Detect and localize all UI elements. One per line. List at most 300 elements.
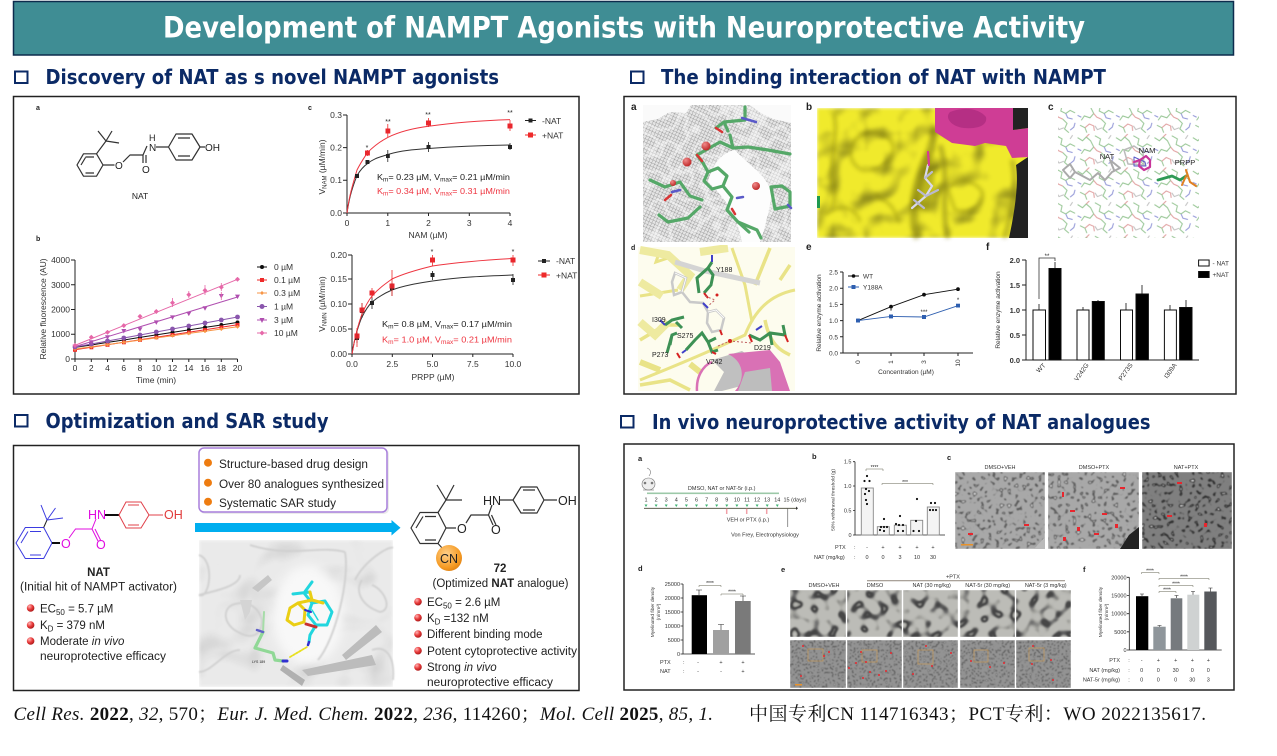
panel b: withdrawal threshold chart: 0 <box>865 555 869 561</box>
panel: optimization and SAR <box>14 446 579 690</box>
panel a: NAT structure: O <box>115 161 123 172</box>
panel f: fiber density chart: 0 <box>1157 678 1160 684</box>
panel a: dosing timeline: VEH or PTX (i.p.) <box>727 518 769 524</box>
panel c: PRPP kinetics: 10.0 <box>505 359 522 369</box>
panel c: nerve micrographs: DMSO+VEH <box>984 465 1016 471</box>
NAT bullet list <box>27 604 166 663</box>
panel b: fluorescence time course: Relative fluorescence (AU) <box>38 258 48 360</box>
panel d: fiber density chart: 0 <box>677 652 680 658</box>
panel d: ribbon interaction view: S275 <box>677 333 693 340</box>
panel a: dosing timeline: 2 <box>655 498 658 504</box>
panel a: dosing timeline: 7 <box>705 498 708 504</box>
panel d: fiber density chart: (n/mm²) <box>656 603 662 620</box>
panel f: mutant activation bar chart: 0.5 <box>1010 331 1020 340</box>
panel d: fiber density chart: - <box>697 669 699 675</box>
panel c: NAM kinetics: 1 <box>385 218 390 228</box>
panel f: fiber density chart: 10000 <box>1111 612 1126 618</box>
NAT caption: NAT <box>87 567 110 579</box>
NAT bullet list: EC <box>40 604 56 616</box>
panel a: dosing timeline: DMSO, NAT or NAT-5r (i.p.) <box>688 486 756 492</box>
panel d: fiber density chart <box>638 564 755 675</box>
compound 72 bullet list: =132 nM <box>440 613 489 625</box>
panel f: fiber density chart: NAT-5r (mg/kg) <box>1083 678 1120 684</box>
panel f: fiber density chart: Myelinated fiber density <box>1098 586 1104 637</box>
panel e: enzyme activation line chart: 1.0 <box>829 318 838 325</box>
panel c: nerve micrographs: c <box>947 453 951 462</box>
panel c: PRPP kinetics: K <box>382 334 388 344</box>
panel e: enzyme activation line chart: 0.5 <box>829 334 838 341</box>
panel d: ribbon interaction view: D219 <box>754 345 771 352</box>
panel f: mutant activation bar chart: 0.0 <box>1010 356 1020 365</box>
panel e: enzyme activation line chart: 0 <box>855 360 862 364</box>
panel e: enzyme activation line chart <box>806 242 973 376</box>
panel a: electron density map: a <box>631 102 637 113</box>
panel c: NAM kinetics: ** <box>425 112 431 119</box>
panel: in vivo activity <box>624 444 1234 690</box>
panel d: fiber density chart: PTX <box>660 660 671 666</box>
compound 72 structure: HN <box>483 494 501 508</box>
panel b: fluorescence time course: 2 <box>89 363 94 373</box>
NAT bullet list: Moderate in vivo <box>40 636 125 648</box>
compound 72 bullet list: D <box>435 618 441 626</box>
panel c: NAM kinetics: * <box>366 145 369 152</box>
panel f: mutant activation bar chart: I309A <box>1163 362 1179 380</box>
panel c: NAM kinetics: 4 <box>508 218 513 228</box>
panel d: fiber density chart: **** <box>706 581 714 587</box>
panel a: dosing timeline: 10 <box>734 498 740 504</box>
heading: binding interaction: The binding interaction of NAT with NAMPT <box>661 65 1106 89</box>
panel c: PRPP kinetics: = 0.17 µM/min <box>453 319 512 329</box>
panel b: fluorescence time course: 10 µM <box>274 328 298 338</box>
panel b: fluorescence time course: 0 µM <box>274 262 293 272</box>
panel f: fiber density chart: 0 <box>1140 678 1143 684</box>
NAT structure colored: O <box>61 537 71 551</box>
panel c: PRPP kinetics: V <box>317 326 327 332</box>
panel b: fluorescence time course: 6 <box>121 363 126 373</box>
compound 72 caption: 72 <box>494 563 506 575</box>
panel a: dosing timeline: Von Frey, Electrophysiology <box>731 532 799 538</box>
panel b: withdrawal threshold chart: 0 <box>848 533 852 539</box>
panel d: fiber density chart: : <box>683 669 685 675</box>
panel c: NAM kinetics: = 0.31 µM/min <box>452 186 510 196</box>
panel d: fiber density chart: - <box>720 669 722 675</box>
panel e: enzyme activation line chart: 2.5 <box>829 270 838 276</box>
panel c: NAM kinetics: c <box>308 105 312 112</box>
panel c: NAM kinetics: 0.3 <box>330 110 342 120</box>
panel a: dosing timeline: 12 <box>754 498 760 504</box>
panel b: fluorescence time course: 8 <box>138 363 143 373</box>
panel e: enzyme activation line chart: Relative enzyme activation <box>816 274 823 352</box>
compound 72 caption: (Optimized NAT analogue) <box>433 578 569 590</box>
panel b: withdrawal threshold chart: 30 <box>930 555 936 561</box>
panel c: PRPP kinetics: m <box>388 324 394 330</box>
panel c: PRPP kinetics: * <box>431 249 434 256</box>
panel c: wireframe with ligands: c <box>1048 102 1054 113</box>
panel b: withdrawal threshold chart: + <box>898 545 902 551</box>
panel b: fluorescence time course: 20 <box>233 363 242 373</box>
panel b: protein surface <box>806 102 1028 238</box>
panel a: dosing timeline: 5 <box>685 498 688 504</box>
panel a: NAT structure <box>36 105 220 201</box>
panel e: enzyme activation line chart: Concentration (µM) <box>878 369 934 376</box>
panel c: NAM kinetics: 0 <box>345 218 350 228</box>
compound 72 bullet list: Different binding mode <box>427 629 542 641</box>
panel d: ribbon interaction view: d <box>631 245 635 252</box>
panel f: fiber density chart: + <box>1191 658 1194 664</box>
panel b: withdrawal threshold chart <box>812 452 945 561</box>
panel b: withdrawal threshold chart: **** <box>871 465 878 471</box>
panel b: withdrawal threshold chart: : <box>854 545 856 551</box>
panel a: dosing timeline: 13 <box>764 498 770 504</box>
panel b: fluorescence time course: 0.1 µM <box>274 275 300 285</box>
panel d: fiber density chart: + <box>741 669 745 675</box>
panel c: PRPP kinetics: 0.10 <box>330 299 347 309</box>
panel a: dosing timeline: 3 <box>665 498 668 504</box>
panel a: NAT structure: H <box>149 133 156 143</box>
panel d: fiber density chart: + <box>719 660 723 666</box>
NAT caption <box>20 567 177 594</box>
panel: discovery of NAT <box>14 96 579 394</box>
panel c: PRPP kinetics: max <box>441 324 453 330</box>
NAT structure colored <box>16 502 183 558</box>
panel c: NAM kinetics: (µM/min) <box>317 139 327 176</box>
panel e: myelin micrographs: NAT-5r (3 mg/kg) <box>1025 583 1067 589</box>
panel b: withdrawal threshold chart: *** <box>902 480 908 486</box>
panel f: fiber density chart: : <box>1128 658 1130 664</box>
panel f: fiber density chart: - <box>1141 658 1143 664</box>
panel d: ribbon interaction view: I309 <box>652 317 666 324</box>
panel b: withdrawal threshold chart: 1.0 <box>844 484 852 490</box>
panel a: dosing timeline: 6 <box>695 498 698 504</box>
panel b: fluorescence time course: 18 <box>217 363 226 373</box>
panel c: PRPP kinetics: (µM/min) <box>317 276 327 312</box>
panel f: mutant activation bar chart: +NAT <box>1212 272 1229 279</box>
panel e: enzyme activation line chart: * <box>957 298 960 304</box>
panel f: fiber density chart: 5000 <box>1114 630 1126 636</box>
panel f: fiber density chart: 30 <box>1189 678 1195 684</box>
panel c: PRPP kinetics: = 1.0 µM, V <box>394 334 441 344</box>
panel d: fiber density chart: d <box>638 564 643 573</box>
panel f: fiber density chart: 0 <box>1191 668 1194 674</box>
panel e: myelin micrographs: NAT-5r (30 mg/kg) <box>965 583 1010 589</box>
panel f: fiber density chart: 0 <box>1174 678 1177 684</box>
panel c: PRPP kinetics: * <box>512 249 515 256</box>
heading: in vivo: In vivo neuroprotective activity of NAT analogues <box>652 410 1150 434</box>
panel f: fiber density chart: : <box>1128 668 1130 674</box>
panel c: PRPP kinetics: 0.15 <box>330 274 347 284</box>
panel b: fluorescence time course: 12 <box>168 363 177 373</box>
panel b: withdrawal threshold chart: + <box>931 545 935 551</box>
panel c: NAM kinetics: K <box>377 172 383 182</box>
panel f: fiber density chart: 30 <box>1173 668 1179 674</box>
arrow: optimization <box>195 520 400 536</box>
panel c: PRPP kinetics: 5.0 <box>427 359 439 369</box>
panel c: NAM kinetics: m <box>383 192 388 198</box>
compound 72 structure: CN <box>440 552 458 566</box>
panel c: PRPP kinetics: max <box>441 340 453 346</box>
panel a: NAT structure: N <box>149 143 156 154</box>
footer: patents: 中国专利CN 114716343；PCT专利：WO 2022135617. <box>749 703 1206 725</box>
panel b: protein surface: b <box>806 102 812 113</box>
panel c: NAM kinetics: 3 <box>467 218 472 228</box>
panel c: NAM kinetics: K <box>377 186 383 196</box>
NAT bullet list: = 5.7 µM <box>65 604 113 616</box>
panel b: withdrawal threshold chart: 0.5 <box>844 509 852 515</box>
panel: binding interaction <box>624 96 1236 394</box>
panel c: wireframe with ligands <box>1048 102 1199 238</box>
panel b: fluorescence time course: 3000 <box>51 280 70 290</box>
panel c: NAM kinetics: 0.1 <box>330 175 342 185</box>
panel b: withdrawal threshold chart: NAT (mg/kg) <box>814 555 845 561</box>
panel d: fiber density chart: - <box>697 660 699 666</box>
panel b: fluorescence time course: 1 µM <box>274 302 293 312</box>
panel b: fluorescence time course <box>36 236 300 385</box>
panel a: dosing timeline: 15 (days) <box>784 498 807 504</box>
panel b: withdrawal threshold chart: + <box>915 545 919 551</box>
panel e: enzyme activation line chart: *** <box>920 310 928 316</box>
panel b: withdrawal threshold chart: b <box>812 452 817 461</box>
panel c: wireframe with ligands: NAM <box>1139 146 1155 155</box>
panel f: mutant activation bar chart: V242G <box>1073 362 1091 383</box>
panel b: fluorescence time course: 0 <box>65 354 70 364</box>
panel e: enzyme activation line chart: e <box>806 242 812 253</box>
NAT structure colored: O <box>96 538 106 552</box>
panel e: enzyme activation line chart: 1 <box>888 360 895 364</box>
compound 72 structure: O <box>491 523 501 537</box>
panel f: fiber density chart: + <box>1174 658 1177 664</box>
NAT caption: (Initial hit of NAMPT activator) <box>20 582 177 594</box>
panel c: PRPP kinetics: 0.20 <box>330 250 347 260</box>
panel c: PRPP kinetics: 0.05 <box>330 324 347 334</box>
panel f: mutant activation bar chart: ** <box>1045 254 1050 260</box>
NAT bullet list: 50 <box>56 608 65 617</box>
panel b: fluorescence time course: 0.3 µM <box>274 288 300 298</box>
panel d: fiber density chart: 20000 <box>665 596 680 602</box>
panel c: NAM kinetics: 0.2 <box>330 142 342 152</box>
strategy box <box>199 448 389 514</box>
panel c: NAM kinetics: = 0.23 µM, V <box>388 172 440 182</box>
panel b: withdrawal threshold chart: 10 <box>914 555 920 561</box>
compound 72 bullet list: Potent cytoprotective activity <box>427 646 577 658</box>
panel f: fiber density chart <box>1083 565 1222 684</box>
panel c: NAM kinetics: max <box>440 192 452 198</box>
compound 72 structure <box>411 485 577 571</box>
panel f: fiber density chart: 0 <box>1123 648 1126 654</box>
panel f: fiber density chart: **** <box>1146 568 1154 574</box>
panel d: ribbon interaction view <box>631 245 795 391</box>
panel d: fiber density chart: **** <box>728 590 736 596</box>
panel e: enzyme activation line chart: * <box>890 309 893 315</box>
panel f: mutant activation bar chart: 2.0 <box>1010 256 1020 265</box>
panel c: NAM kinetics: NAM (µM) <box>409 230 448 240</box>
footer: journal references: Cell Res. 2022, 32, 570；Eur. J. Med. Chem. 2022, 236, 114260；Mol. Cell 2025, 85, 1. <box>14 699 713 726</box>
panel c: PRPP kinetics: +NAT <box>556 270 577 280</box>
panel f: fiber density chart: + <box>1157 658 1160 664</box>
panel e: enzyme activation line chart: 10 <box>955 359 962 367</box>
panel c: PRPP kinetics: 2.5 <box>386 359 398 369</box>
panel b: withdrawal threshold chart: 3 <box>898 555 902 561</box>
panel e: enzyme activation line chart: 0.0 <box>829 350 838 358</box>
panel c: PRPP kinetics: 7.5 <box>467 359 479 369</box>
panel b: fluorescence time course: 4 <box>105 363 110 373</box>
panel c: nerve micrographs <box>947 453 1232 549</box>
panel b: withdrawal threshold chart: 0 <box>881 555 885 561</box>
panel a: NAT structure: a <box>36 105 40 112</box>
panel a: NAT structure: NAT <box>132 191 148 201</box>
panel a: NAT structure: O <box>142 165 150 176</box>
compound 72 bullet list: K <box>427 613 435 625</box>
panel a: dosing timeline: 14 <box>774 498 780 504</box>
panel a: dosing timeline: 9 <box>725 498 728 504</box>
heading: discovery: Discovery of NAT as s novel NAMPT agonists <box>46 65 499 89</box>
panel f: mutant activation bar chart <box>986 242 1229 383</box>
panel d: fiber density chart: NAT <box>660 669 671 675</box>
panel c: nerve micrographs: DMSO+PTX <box>1079 465 1110 471</box>
panel e: myelin micrographs: DMSO+VEH <box>808 583 840 589</box>
panel b: fluorescence time course: 14 <box>184 363 194 373</box>
panel d: fiber density chart: Myelinated fiber density <box>650 586 656 637</box>
panel b: fluorescence time course: 2000 <box>51 304 70 314</box>
panel f: fiber density chart: PTX <box>1109 658 1120 664</box>
panel c: PRPP kinetics: = 0.8 µM, V <box>394 319 441 329</box>
panel d: fiber density chart: 25000 <box>665 582 680 588</box>
panel e: myelin micrographs: +PTX <box>946 574 960 580</box>
panel c: NAM kinetics: m <box>383 178 388 184</box>
panel b: fluorescence time course: 0 <box>73 363 78 373</box>
NAT bullet list: = 379 nM <box>53 620 105 632</box>
NAT structure colored: HN <box>88 508 106 522</box>
panel e: enzyme activation line chart: 1.5 <box>829 302 838 309</box>
strategy box: Structure-based drug design <box>219 459 368 471</box>
panel d: fiber density chart: 5000 <box>668 638 680 644</box>
panel f: fiber density chart: NAT (mg/kg) <box>1089 668 1120 674</box>
compound 72 bullet list: EC <box>427 597 443 609</box>
strategy box: Over 80 analogues synthesized <box>219 479 384 491</box>
panel a: dosing timeline: 4 <box>675 498 678 504</box>
panel c: NAM kinetics: = 0.21 µM/min <box>452 172 510 182</box>
panel c: wireframe with ligands: NAT <box>1100 152 1115 161</box>
NAT bullet list: K <box>40 620 48 632</box>
panel c: NAM kinetics: +NAT <box>542 130 563 140</box>
heading: optimization: Optimization and SAR study <box>46 409 328 433</box>
panel f: fiber density chart: 0 <box>1140 668 1143 674</box>
panel f: mutant activation bar chart: P273S <box>1118 362 1135 382</box>
panel e: myelin micrographs: DMSO <box>867 583 884 589</box>
panel f: mutant activation bar chart: f <box>986 242 990 253</box>
panel c: PRPP kinetics: = 0.21 µM/min <box>453 334 512 344</box>
panel f: fiber density chart: **** <box>1172 582 1180 588</box>
panel c: NAM kinetics: ** <box>507 110 513 117</box>
panel c: PRPP kinetics: NMN <box>322 312 328 326</box>
panel c: PRPP kinetics <box>317 249 577 382</box>
panel e: enzyme activation line chart: WT <box>863 274 873 280</box>
panel c: PRPP kinetics: -NAT <box>556 256 575 266</box>
panel c: PRPP kinetics: PRPP (µM) <box>412 372 455 382</box>
panel c: NAM kinetics: 0.0 <box>330 208 342 218</box>
panel f: fiber density chart: : <box>1128 678 1130 684</box>
panel b: fluorescence time course: 1000 <box>51 329 70 339</box>
panel d: ribbon interaction view: Y188 <box>716 267 732 274</box>
panel e: myelin micrographs <box>781 565 1071 688</box>
compound 72 structure: O <box>457 522 467 536</box>
panel d: fiber density chart: : <box>683 660 685 666</box>
compound 72 bullet list: 50 <box>443 602 452 610</box>
compound 72 bullet list: neuroprotective efficacy <box>427 677 553 689</box>
panel c: NAM kinetics: = 0.34 µM, V <box>388 186 440 196</box>
panel c: PRPP kinetics: m <box>388 340 394 346</box>
panel c: wireframe with ligands: PRPP <box>1175 158 1195 167</box>
panel c: NAM kinetics <box>308 105 563 240</box>
panel f: mutant activation bar chart: Relative enzyme activation <box>995 271 1002 349</box>
panel c: PRPP kinetics: K <box>382 319 388 329</box>
title banner: Development of NAMPT Agonists with Neuroprotective Activity <box>163 10 1085 44</box>
panel b: withdrawal threshold chart: + <box>881 545 885 551</box>
panel d: fiber density chart: 10000 <box>665 624 680 630</box>
panel b: fluorescence time course: 3 µM <box>274 315 293 325</box>
panel f: mutant activation bar chart: 1.0 <box>1010 306 1020 315</box>
compound 72 bullet list: = 2.6 µM <box>452 597 500 609</box>
panel c: NAM kinetics: -NAT <box>542 116 561 126</box>
panel f: fiber density chart: 20000 <box>1111 575 1126 581</box>
panel c: PRPP kinetics: 0.0 <box>346 359 358 369</box>
panel f: fiber density chart: 15000 <box>1111 594 1126 600</box>
panel f: fiber density chart: 0 <box>1207 668 1210 674</box>
panel a: NAT structure: OH <box>205 143 220 154</box>
panel d: ribbon interaction view: V242 <box>706 359 722 366</box>
panel e: enzyme activation line chart: 3 <box>921 360 928 364</box>
panel a: electron density map <box>631 102 791 242</box>
compound 72 bullet list <box>414 597 577 689</box>
panel f: fiber density chart: 0 <box>1157 668 1160 674</box>
NAT structure colored: OH <box>164 508 183 522</box>
panel b: withdrawal threshold chart: 50% withdrawal threshold (g) <box>830 469 836 531</box>
panel a: dosing timeline: a <box>638 454 643 463</box>
panel b: fluorescence time course: 4000 <box>51 255 70 265</box>
docking image: LYS 189 <box>252 660 265 664</box>
panel c: PRPP kinetics: 0.00 <box>330 349 347 359</box>
panel f: fiber density chart: (n/mm²) <box>1104 603 1110 620</box>
panel f: fiber density chart: **** <box>1180 574 1188 580</box>
panel b: withdrawal threshold chart: : <box>854 555 856 561</box>
compound 72 bullet list: Strong in vivo <box>427 662 497 674</box>
panel b: fluorescence time course: Time (min) <box>136 375 176 385</box>
panel a: dosing timeline: 1 <box>644 498 648 504</box>
panel b: fluorescence time course: 10 <box>152 363 161 373</box>
panel e: enzyme activation line chart: Y188A <box>863 284 883 292</box>
panel c: NAM kinetics: ** <box>385 119 391 126</box>
panel f: mutant activation bar chart: WT <box>1035 362 1047 375</box>
docking image <box>199 540 393 687</box>
panel a: dosing timeline: 8 <box>715 498 718 504</box>
panel f: fiber density chart: **** <box>1163 588 1171 594</box>
panel f: fiber density chart: + <box>1207 658 1210 664</box>
panel b: withdrawal threshold chart: 1.5 <box>844 460 852 466</box>
panel b: fluorescence time course: b <box>36 236 40 243</box>
panel f: fiber density chart: f <box>1083 565 1086 574</box>
panel d: ribbon interaction view: P273 <box>652 352 668 359</box>
panel c: NAM kinetics: NAM <box>322 176 328 189</box>
icon: mouse <box>642 468 655 490</box>
panel e: myelin micrographs: e <box>781 565 785 574</box>
panel d: fiber density chart: 15000 <box>665 610 680 616</box>
panel c: NAM kinetics: 2 <box>426 218 431 228</box>
panel f: mutant activation bar chart: 1.5 <box>1010 281 1020 290</box>
panel a: dosing timeline: 11 <box>744 498 750 504</box>
panel c: NAM kinetics: V <box>317 189 327 195</box>
panel e: myelin micrographs: NAT (30 mg/kg) <box>913 583 951 589</box>
compound 72 caption <box>433 563 569 590</box>
panel d: fiber density chart: + <box>741 660 745 666</box>
